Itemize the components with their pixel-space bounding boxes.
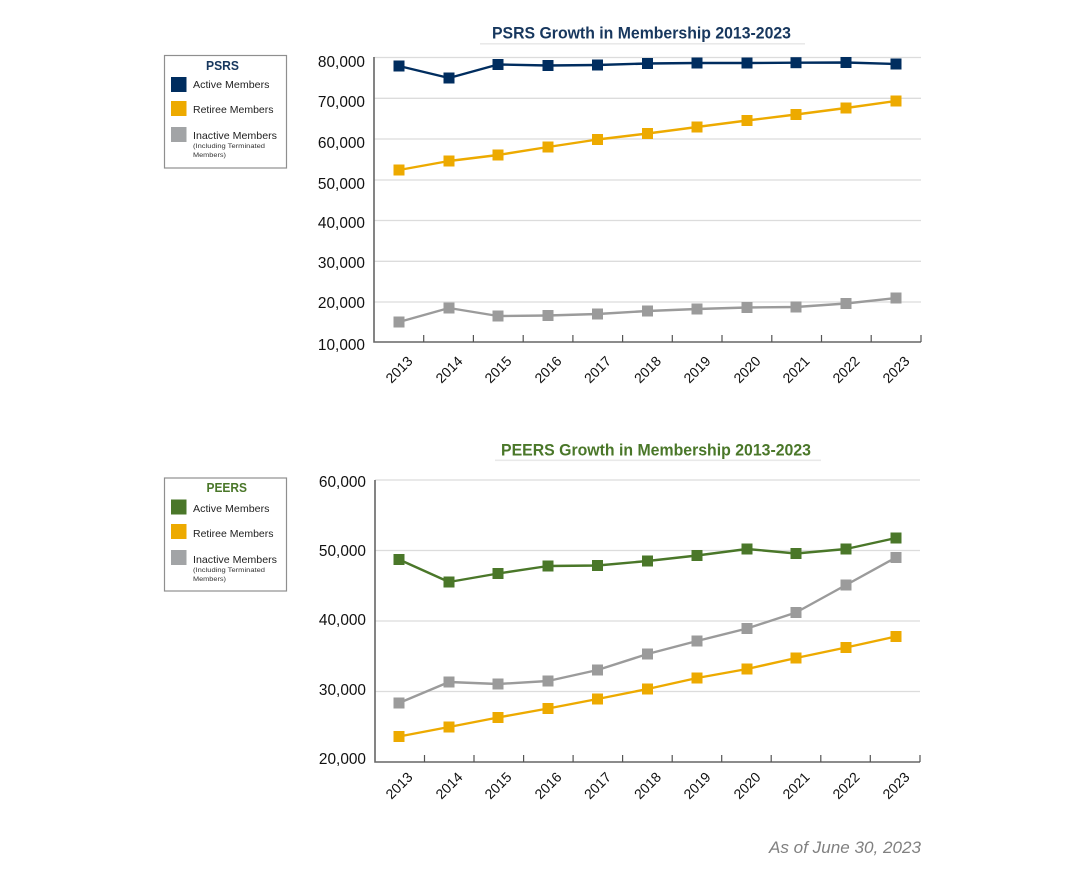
series: PSRS retiree members [394,96,902,176]
series: PEERS retiree members [394,631,902,742]
y axis labels: 20,000 [318,295,365,312]
y axis labels: 20,000 [319,751,366,768]
x axis labels: 2021 [779,769,813,802]
x axis labels: 2018 [631,353,664,386]
chart: PSRS line chart [318,54,921,386]
y axis labels: 50,000 [318,176,365,193]
legend: PSRS: Members) [193,152,226,159]
panel: PEERS chart section [164,442,920,802]
series: PSRS active members [394,57,902,84]
legend: PEERS [164,478,286,591]
x axis labels: 2020 [730,769,764,802]
x axis labels: 2016 [531,769,565,802]
x axis labels [382,769,913,802]
x axis labels: 2022 [829,769,863,802]
x axis labels: 2023 [879,769,913,802]
legend: PEERS: Inactive Members [193,554,277,566]
legend: PSRS [164,56,286,168]
series: PEERS active members [394,532,902,588]
title: PSRS growth in membership: PSRS Growth in Membership 2013-2023 [492,24,791,42]
legend: PEERS: (Including Terminated [193,567,265,574]
y axis labels: 60,000 [318,135,365,152]
x axis labels: 2015 [481,769,515,802]
y axis labels: 60,000 [319,474,366,491]
x axis labels: 2014 [432,769,466,802]
x axis labels: 2017 [581,353,614,386]
legend: PSRS: Active Members [193,79,270,91]
series: PEERS inactive members [394,552,902,708]
chart: PEERS line chart [319,474,920,802]
x axis labels: 2015 [481,353,515,386]
x axis labels: 2017 [581,769,614,802]
x axis labels: 2019 [680,353,714,386]
panel: PSRS chart section [164,24,921,386]
x axis labels: 2020 [730,353,764,386]
title: PEERS growth in membership: PEERS Growth in Membership 2013-2023 [501,442,811,460]
y axis labels [319,474,366,768]
legend: PSRS: Inactive Members [193,130,277,142]
legend: PSRS: Retiree Members [193,104,274,116]
y axis labels: 10,000 [318,337,365,354]
y axis labels [318,54,365,354]
legend: PEERS: Members) [193,576,226,583]
legend: PSRS: (Including Terminated [193,143,265,150]
x axis labels: 2013 [382,769,416,802]
legend: PEERS: Active Members [193,503,270,515]
series: PSRS inactive members [394,292,902,328]
y axis labels: 40,000 [319,612,366,629]
footnote: as-of date: As of June 30, 2023 [768,838,922,857]
x axis labels: 2022 [829,353,863,386]
legend: PSRS: PSRS [206,59,239,73]
x axis labels: 2018 [631,769,664,802]
legend: PEERS: Retiree Members [193,528,274,540]
y axis labels: 70,000 [318,94,365,111]
legend: PEERS: PEERS [206,481,247,495]
x axis labels: 2014 [432,353,466,386]
y axis labels: 50,000 [319,543,366,560]
x axis labels: 2023 [879,353,913,386]
x axis labels: 2016 [531,353,565,386]
y axis labels: 40,000 [318,215,365,232]
y axis labels: 30,000 [318,255,365,272]
y axis labels: 80,000 [318,54,365,71]
x axis labels: 2013 [382,353,416,386]
x axis labels [382,353,913,386]
x axis labels: 2021 [779,353,813,386]
x axis labels: 2019 [680,769,714,802]
y axis labels: 30,000 [319,682,366,699]
